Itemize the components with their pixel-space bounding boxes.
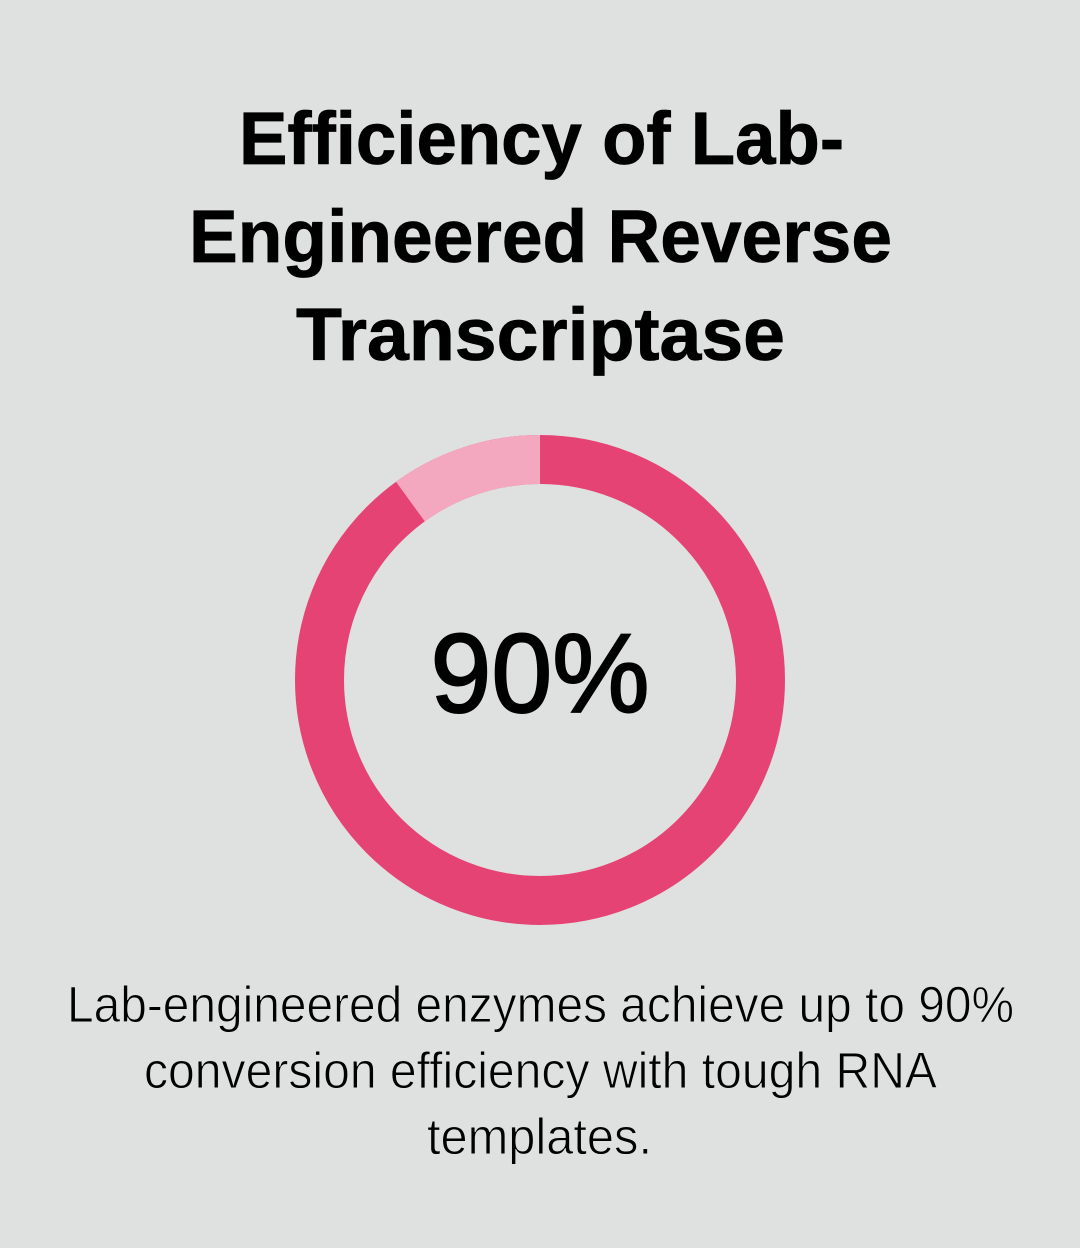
description: conversion efficiency with tough RNA [144, 1042, 937, 1099]
description: Lab-engineered enzymes achieve up to 90% [67, 976, 1014, 1033]
donut value: 90% [430, 611, 650, 736]
title [189, 97, 892, 376]
title: Efficiency of Lab- [239, 97, 844, 180]
description [67, 976, 1014, 1165]
title: Transcriptase [296, 293, 785, 376]
description: templates. [427, 1108, 652, 1165]
donut chart: 90% [320, 459, 760, 900]
title: Engineered Reverse [189, 195, 892, 278]
